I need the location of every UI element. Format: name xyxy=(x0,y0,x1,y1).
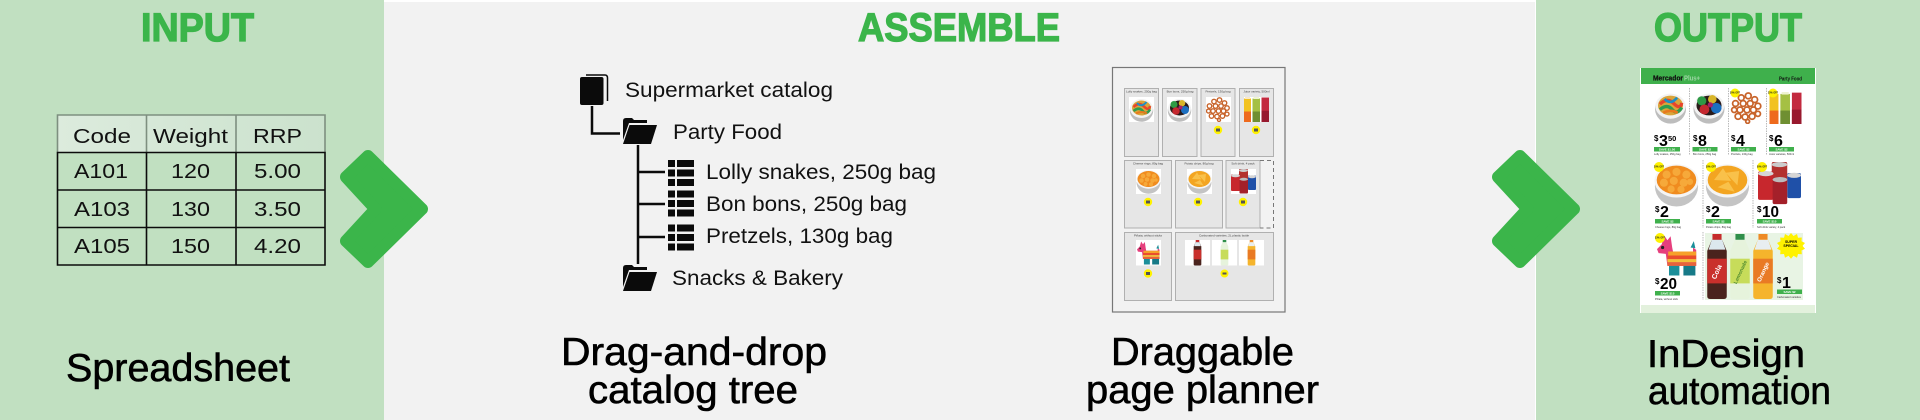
products row 2: SAVE $10 xyxy=(1763,220,1777,224)
spreadsheet table: 150 xyxy=(171,236,210,258)
spreadsheet table: Code xyxy=(73,126,131,148)
page footer strip xyxy=(1641,305,1815,313)
products row 2: Potato chips, 80g bag xyxy=(1706,225,1732,229)
products row 3: $ xyxy=(1777,276,1782,285)
products row 2: 20% OFF xyxy=(1654,166,1665,168)
planner row 1 xyxy=(1124,88,1274,156)
catalog output page xyxy=(1640,68,1816,313)
products row 1: SAVE $2 xyxy=(1699,148,1711,152)
products row 1: 8 xyxy=(1698,133,1707,150)
products row 3: Piñata, without stick xyxy=(1655,297,1679,301)
products row 3: Orange xyxy=(1757,261,1771,283)
planner row 2 xyxy=(1124,160,1274,228)
icon: folder party food xyxy=(623,118,657,144)
products row 2: $ xyxy=(1757,205,1762,214)
catalog tree xyxy=(580,75,936,291)
planner row 2: Potato chips, 80g bag xyxy=(1184,162,1214,166)
spreadsheet table: A103 xyxy=(74,199,130,221)
spreadsheet table: RRP xyxy=(253,126,302,148)
products row 1: 4 xyxy=(1736,133,1745,150)
callout: super special xyxy=(1777,233,1805,259)
products row 2: 50% OFF xyxy=(1757,166,1768,168)
products row 1: $ xyxy=(1654,134,1659,143)
products row 3: SAVE $2 xyxy=(1783,290,1796,294)
products row 1: SAVE $2 xyxy=(1737,148,1750,152)
products row 3: Lemonade xyxy=(1733,260,1749,285)
caption: draggable page planner: page planner xyxy=(1086,369,1319,412)
spreadsheet table: A105 xyxy=(74,236,130,258)
caption: drag-and-drop catalog tree: Drag-and-drop xyxy=(561,331,827,374)
products row 1: 30% OFF xyxy=(1730,92,1741,94)
icon: list lolly snakes xyxy=(668,160,694,186)
callout: super special: SUPER xyxy=(1785,240,1797,244)
panel: assemble xyxy=(384,2,1535,420)
caption: drag-and-drop catalog tree: catalog tree xyxy=(588,369,798,412)
products row 2: 2 xyxy=(1711,204,1720,221)
arrow: assemble to output xyxy=(1498,156,1574,262)
spreadsheet table xyxy=(58,115,325,265)
arrow: input to assemble xyxy=(346,156,422,262)
tree connectors xyxy=(592,106,665,264)
label: party food: Party Food xyxy=(673,120,782,144)
label: bon bons: Bon bons, 250g bag xyxy=(706,192,907,216)
spreadsheet table: 5.00 xyxy=(254,161,301,183)
planner row 2: Soft drink, 4 pack xyxy=(1231,162,1255,166)
products row 1: $ xyxy=(1693,134,1698,143)
heading: output: OUTPUT xyxy=(1654,6,1802,50)
label: pretzels: Pretzels, 130g bag xyxy=(706,224,893,248)
planner row 1: Lolly snakes, 250g bag xyxy=(1126,90,1157,94)
products row 3: 20 xyxy=(1660,276,1677,293)
page header: Party Food xyxy=(1779,76,1802,82)
products row 1: Pretzels, 130g bag xyxy=(1731,152,1753,156)
page planner xyxy=(1112,68,1285,312)
planner row 2: Cheese rings, 80g bag xyxy=(1133,162,1163,166)
page header: Mercador xyxy=(1653,76,1683,82)
caption: indesign automation xyxy=(1647,333,1831,413)
products row 3: Cola xyxy=(1711,264,1724,281)
dividers xyxy=(1690,88,1766,300)
products row 2: SAVE $2 xyxy=(1661,220,1674,224)
heading: assemble: ASSEMBLE xyxy=(858,6,1060,50)
products row 1 xyxy=(1654,88,1802,156)
spreadsheet table: 130 xyxy=(171,199,210,221)
products row 2: 10 xyxy=(1762,204,1779,221)
products row 2: Soft drink variety, 4 pack xyxy=(1757,225,1786,229)
products row 1: $ xyxy=(1731,134,1736,143)
planner row 3 xyxy=(1124,232,1274,300)
spreadsheet table: Weight xyxy=(153,126,229,148)
products row 1: SAVE $2 xyxy=(1775,148,1788,152)
caption: drag-and-drop catalog tree xyxy=(561,331,827,412)
products row 3: 33% OFF xyxy=(1655,236,1666,240)
caption: draggable page planner: Draggable xyxy=(1111,331,1294,374)
icon: catalog book xyxy=(580,75,608,105)
products row 3: $ xyxy=(1655,277,1660,286)
panel: input xyxy=(0,0,384,420)
label: snacks and bakery: Snacks & Bakery xyxy=(672,266,843,290)
products row 2 xyxy=(1654,162,1801,229)
products row 2: $ xyxy=(1706,205,1711,214)
products row 1: SAVE $1.50 xyxy=(1659,148,1675,152)
products row 1: $ xyxy=(1769,134,1774,143)
panel: output xyxy=(1536,0,1920,420)
planner row 1: Bon bons, 250g bag xyxy=(1167,90,1194,94)
products row 1: Juice varieties, 500ml xyxy=(1769,152,1794,156)
label: lolly snakes: Lolly snakes, 250g bag xyxy=(706,160,936,184)
products row 2: $ xyxy=(1655,205,1660,214)
products row 1: 3 xyxy=(1659,133,1668,150)
products row 2: 2 xyxy=(1660,204,1669,221)
icon: list pretzels xyxy=(668,224,694,250)
caption: spreadsheet: Spreadsheet xyxy=(66,347,290,390)
products row 1: Lolly snakes, 250g bag xyxy=(1654,152,1681,156)
spreadsheet table: 120 xyxy=(171,161,210,183)
planner row 1: Juice variety, 500ml xyxy=(1243,90,1270,94)
products row 1: 50 xyxy=(1668,134,1676,143)
products row 3 xyxy=(1641,233,1815,313)
products row 1: 6 xyxy=(1774,133,1783,150)
products row 3: 1 xyxy=(1782,275,1791,292)
caption: indesign automation: automation xyxy=(1648,370,1831,413)
spreadsheet table: 4.20 xyxy=(254,236,301,258)
heading: input: INPUT xyxy=(141,6,254,50)
products row 2: SAVE $2 xyxy=(1712,220,1725,224)
icon: folder snacks xyxy=(623,265,657,291)
planner row 3: Piñata, without sticks xyxy=(1134,234,1163,238)
products row 3: SAVE $15 xyxy=(1661,292,1675,296)
caption: draggable page planner xyxy=(1086,331,1319,412)
products row 1: Bon bons, 250g bag xyxy=(1693,152,1717,156)
page header: Plus+ xyxy=(1684,76,1700,82)
spreadsheet table: A101 xyxy=(74,161,128,183)
planner row 3: Carbonated varieties, 2L plastic bottle xyxy=(1199,234,1249,238)
callout: super special: SPECIAL xyxy=(1783,244,1799,248)
products row 3: Carbonated varieties xyxy=(1777,295,1802,299)
planner row 1: Pretzels, 130g bag xyxy=(1205,90,1231,94)
products row 1: 25% OFF xyxy=(1768,92,1779,94)
products row 2: 30% OFF xyxy=(1706,166,1717,168)
spreadsheet table: 3.50 xyxy=(254,199,301,221)
products row 2: Cheese rings, 80g bag xyxy=(1655,225,1682,229)
label: supermarket catalog: Supermarket catalog xyxy=(625,78,833,102)
page header xyxy=(1641,68,1815,84)
icon: list bon bons xyxy=(668,190,694,216)
caption: indesign automation: InDesign xyxy=(1647,333,1805,376)
